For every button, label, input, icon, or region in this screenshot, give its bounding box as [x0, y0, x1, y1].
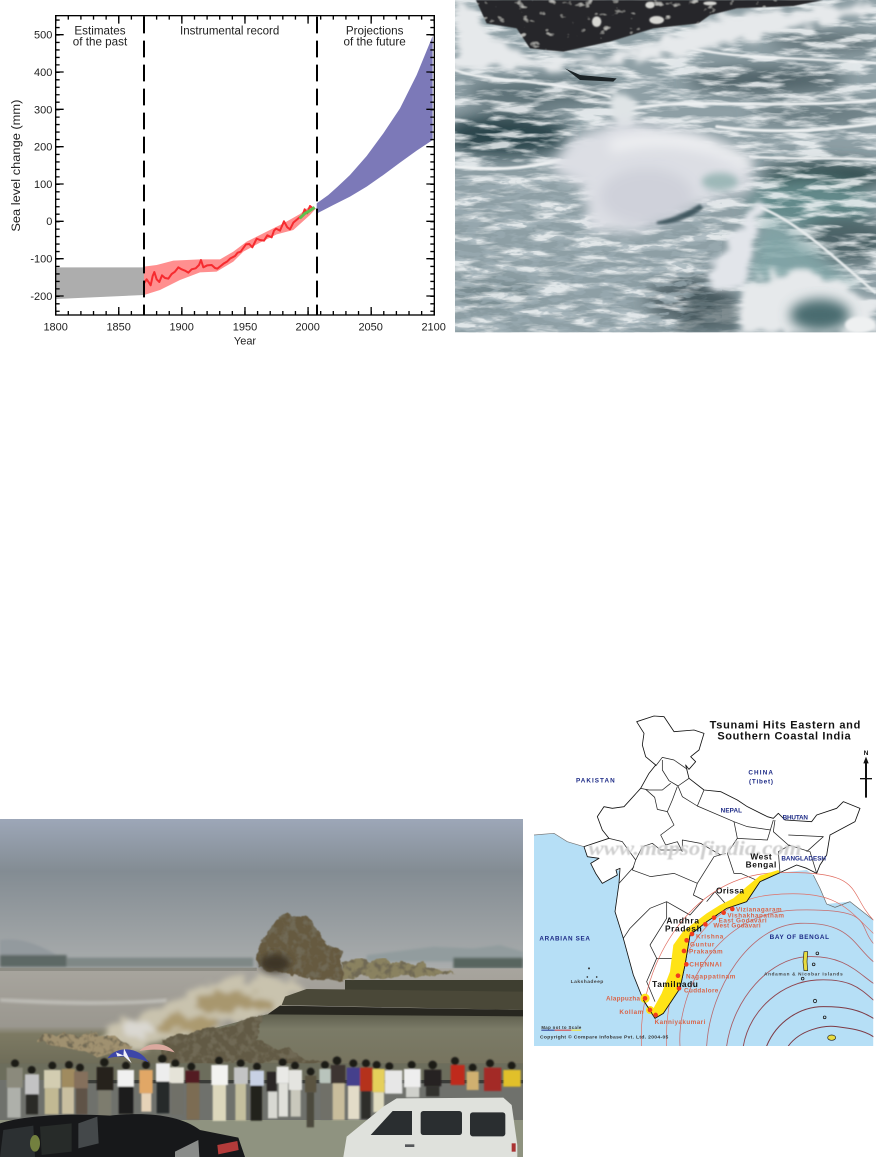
instrumental record line: [144, 206, 313, 285]
crowd of spectators: [7, 1055, 521, 1127]
y axis tick labels: 0: [46, 216, 52, 228]
x axis tick labels: 1950: [233, 322, 257, 334]
water spray plume: [258, 912, 455, 982]
tsunami wave arcs: [641, 872, 873, 1046]
north arrow: N: [864, 750, 869, 757]
state labels: West: [750, 851, 772, 861]
lower left foam net pattern: [455, 180, 722, 332]
map: tsunami hits eastern and southern coastal India: [534, 716, 873, 1046]
Pakistan coast line: [534, 833, 584, 847]
umbrellas: [107, 1044, 175, 1063]
country and sea labels: (Tibet): [749, 779, 773, 786]
y axis title: Sea level change (mm): [9, 100, 23, 232]
district labels: Prakasam: [689, 949, 723, 956]
y axis tick labels: 200: [34, 142, 52, 154]
district labels: West Godavari: [713, 922, 761, 929]
photo: tidal bore crowd watching wave over sea wall: [0, 819, 523, 1157]
map title: Southern Coastal India: [717, 730, 852, 742]
y axis tick labels: 500: [34, 30, 52, 42]
country and sea labels: BANGLADESH: [781, 856, 826, 863]
photo: breaking ocean waves: [443, 0, 876, 333]
affected district markers: [643, 907, 735, 1017]
period label: estimates of the past: of the past: [73, 35, 128, 48]
x axis tick labels: [43, 322, 446, 334]
island labels and shapes: Andaman & Nicobar Islands: [764, 971, 843, 976]
affected coastline band: [640, 870, 780, 1018]
torsos: [7, 1068, 23, 1088]
railing wall: [0, 1078, 523, 1120]
x axis tick labels: 2000: [295, 322, 320, 334]
state labels: Orissa: [716, 886, 744, 896]
x axis tick labels: 1800: [43, 322, 68, 334]
sea wall top tiers: [267, 980, 523, 1017]
foam texture: [455, 0, 876, 332]
ocean: [534, 833, 873, 1046]
district labels: CHENNAI: [689, 961, 722, 968]
map scale note: Map not to Scale: [541, 1025, 582, 1030]
instrumental record uncertainty band: [144, 206, 316, 295]
distant hills and city: [0, 939, 523, 968]
country and sea labels: BAY OF BENGAL: [770, 934, 829, 941]
rock highlights: [592, 1, 717, 27]
trousers: [7, 1088, 21, 1118]
estimates of the past band: [56, 267, 144, 299]
surging bore foam: [100, 978, 302, 1048]
island labels and shapes: Lakshadeep: [571, 979, 603, 985]
map watermark: www.mapsofindia.com: [588, 838, 802, 860]
y axis tick labels: 100: [34, 179, 52, 191]
India land outline: [584, 716, 860, 1018]
white van: [343, 1098, 517, 1157]
state labels: Pradesh: [665, 924, 702, 934]
country and sea labels: CHINA: [748, 770, 773, 777]
period label: instrumental record: Instrumental record: [180, 23, 279, 37]
state labels: Tamilnadu: [652, 979, 698, 989]
district labels: Vizianagaram: [736, 907, 782, 914]
x axis tick labels: 1850: [106, 322, 131, 334]
y axis tick labels: [30, 30, 52, 303]
island labels and shapes: [571, 952, 843, 1040]
rocky embankment: [214, 1014, 523, 1033]
map title: Tsunami Hits Eastern and: [710, 720, 860, 732]
district labels: Alappuzha: [606, 995, 640, 1002]
main breaking wave: [550, 120, 750, 233]
foam streaks: [455, 43, 876, 169]
district labels: Cuddalore: [684, 987, 719, 994]
y axis tick labels: 300: [34, 104, 52, 116]
country and sea labels: PAKISTAN: [576, 778, 615, 785]
state labels: Bengal: [746, 860, 776, 870]
district labels: Vishakhapatnam: [727, 913, 784, 920]
x axis tick labels: 2050: [358, 322, 383, 334]
satellite altimeter line: [300, 207, 315, 218]
country and sea labels: [539, 770, 829, 943]
river water: [0, 968, 523, 1065]
country and sea labels: BHUTAN: [783, 814, 808, 821]
district labels: East Godavari: [719, 918, 767, 925]
district labels: Nagappatinam: [686, 973, 736, 980]
copyright: Copyright © Compare Infobase Pvt. Ltd. 2004-05: [540, 1034, 669, 1041]
y axis tick labels: -200: [30, 291, 52, 303]
district labels: Guntur: [690, 941, 715, 948]
wave front on left: [37, 1034, 133, 1060]
dark rocks: [476, 0, 823, 52]
line chart: sea level change 1800-2100: [9, 16, 446, 348]
north arrow: [860, 750, 872, 798]
projections of the future band: [317, 36, 433, 214]
x axis tick labels: 1900: [169, 322, 194, 334]
coast line over band: [643, 873, 780, 1018]
small dark rock in surf: [565, 68, 617, 82]
y axis tick labels: 400: [34, 67, 52, 79]
state labels: Andhra: [666, 915, 699, 925]
country and sea labels: ARABIAN SEA: [539, 936, 590, 943]
sky: [0, 819, 523, 969]
country and sea labels: NEPAL: [721, 808, 742, 815]
dark sedan car: [0, 1114, 245, 1157]
lower right wave: [700, 203, 876, 333]
x axis title: Year: [234, 336, 256, 348]
ground: [0, 1117, 523, 1157]
dark water patches: [443, 33, 876, 323]
period label: estimates of the past: Estimates: [74, 24, 126, 37]
Burma coast line: [813, 875, 873, 920]
x axis tick labels: 2100: [421, 322, 446, 334]
district labels: Kollam: [619, 1009, 644, 1016]
y axis tick labels: -100: [30, 254, 52, 266]
district labels: [606, 907, 784, 1026]
district labels: Kanniyakumari: [655, 1019, 706, 1026]
state borders: [609, 757, 823, 1002]
wave crest glow: [610, 140, 750, 167]
heads: [11, 1055, 516, 1076]
district labels: Krishna: [696, 933, 724, 940]
period label: projections of the future: Projections: [346, 24, 404, 37]
white foam bands: [455, 2, 876, 127]
period label: projections of the future: of the future: [344, 35, 406, 48]
trough shadow under crest: [657, 204, 703, 224]
plot frame and ticks: [55, 16, 435, 315]
state labels: [652, 851, 776, 989]
teal wave face: [702, 173, 738, 190]
period dividers: [144, 17, 317, 315]
bore surface streak: [0, 998, 167, 1005]
